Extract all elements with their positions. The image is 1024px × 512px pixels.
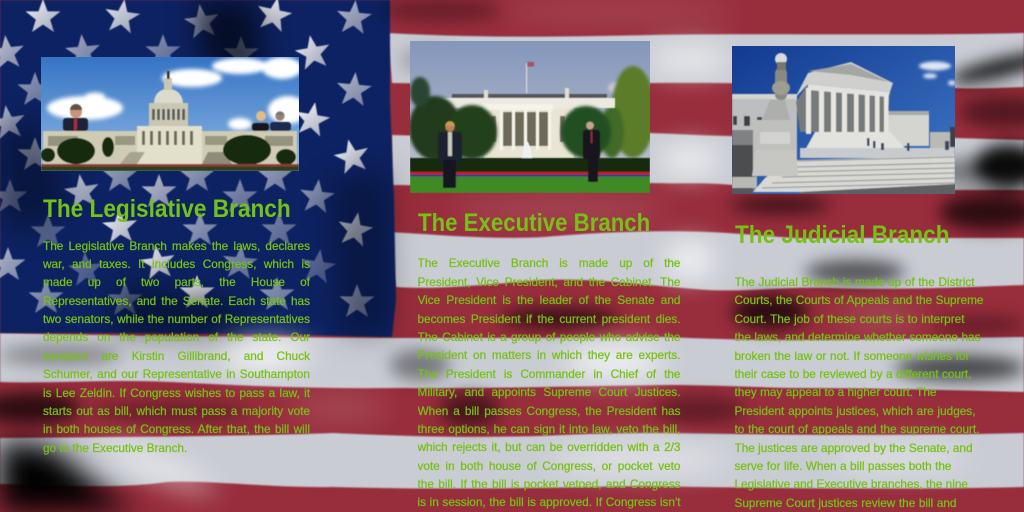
photo: White House with president and vice president [410, 41, 650, 193]
stars [0, 0, 375, 317]
text block: legislative description: The Legislative Branch makes the laws, declares [43, 238, 310, 252]
text block: executive description: the bill. If the bill is pocket vetoed, and Congress [418, 477, 680, 491]
text block: executive description: three options, he can sign it into law, veto the bill, [418, 422, 680, 436]
text block: executive description: President, Vice President, and the Cabinet. The [418, 275, 680, 289]
photo: Supreme Court building [732, 46, 955, 194]
text block: legislative description: in both houses of Congress. After that, the bill will [43, 422, 310, 436]
text block: legislative description: two senators, while the number of Representatives [43, 312, 310, 326]
text block: legislative description [43, 238, 310, 455]
text block: legislative description: depends on the population of the state. Our [43, 330, 310, 344]
text block: judicial description: The Judicial Branch is made up of the District [734, 275, 974, 289]
text block: executive description: The Executive Branch is made up of the [418, 256, 680, 270]
text block: executive description: becomes President if the current president dies. [418, 312, 680, 326]
text block: executive description: Vice President is the leader of the Senate and [418, 293, 680, 307]
heading: The Judicial Branch: The Judicial Branch [734, 221, 949, 249]
text block: judicial description: The justices are approved by the Senate, and [734, 441, 973, 455]
text block: executive description: President on matters in which they are experts. [418, 348, 680, 362]
text block: judicial description: broken the law or not. If someone wishes for [734, 349, 970, 363]
text block: legislative description: Representatives, and the Senate. Each state has [43, 294, 310, 308]
text block: judicial description: President appoints justices, which are judges, [734, 404, 976, 418]
text block: executive description: The Cabinet is a group of people who advise the [418, 330, 680, 344]
photo: US Capitol with legislators [41, 57, 299, 171]
text block: judicial description: Courts, the Courts of Appeals and the Supreme [734, 293, 984, 307]
text block: judicial description: their case to be reviewed by a different court, [734, 367, 972, 381]
text block: judicial description: they may appeal to a higher court. The [734, 385, 936, 399]
text block: legislative description: senators are Kirstin Gillibrand, and Chuck [43, 349, 310, 363]
text block: legislative description: made up of two parts, the House of [43, 275, 310, 289]
text block: judicial description [734, 275, 984, 510]
text block: judicial description: the laws, and determine whether someone has [734, 330, 980, 344]
text block: legislative description: starts out as bill, which must pass a majority vote [43, 404, 310, 418]
text block: legislative description: is Lee Zeldin. If Congress wishes to pass a law, it [43, 386, 310, 400]
text block: executive description: Military, and appoints Supreme Court Justices. [418, 385, 680, 399]
text block: executive description [418, 256, 681, 509]
text block: executive description: which rejects it, but can be overridden with a 2/3 [418, 440, 680, 454]
text block: legislative description: Schumer, and our Representative in Southampton [43, 367, 310, 381]
text block: judicial description: Court. The job of these courts is to interpret [734, 312, 964, 326]
text block: executive description: When a bill passes Congress, the President has [418, 404, 680, 418]
text block: executive description: vote in both house of Congress, or pocket veto [418, 459, 680, 473]
text block: judicial description: serve for life. When a bill passes both the [734, 459, 952, 473]
canton [0, 0, 396, 337]
text block: judicial description: Legislative and Executive branches, the nine [734, 477, 968, 491]
text block: judicial description: Supreme Court justices review the bill and [734, 496, 956, 510]
heading: The Executive Branch: The Executive Branch [418, 209, 650, 237]
text block: executive description: The President is Commander in Chief of the [418, 367, 680, 381]
text block: legislative description: war, and taxes. It includes Congress, which is [43, 257, 310, 271]
text block: executive description: is in session, the bill is approved. If Congress isn't [418, 495, 680, 509]
text block: judicial description: to the court of appeals and the supreme court. [734, 422, 980, 436]
heading: The Legislative Branch: The Legislative Branch [43, 195, 291, 223]
text block: legislative description: go to the Executive Branch. [43, 441, 187, 455]
